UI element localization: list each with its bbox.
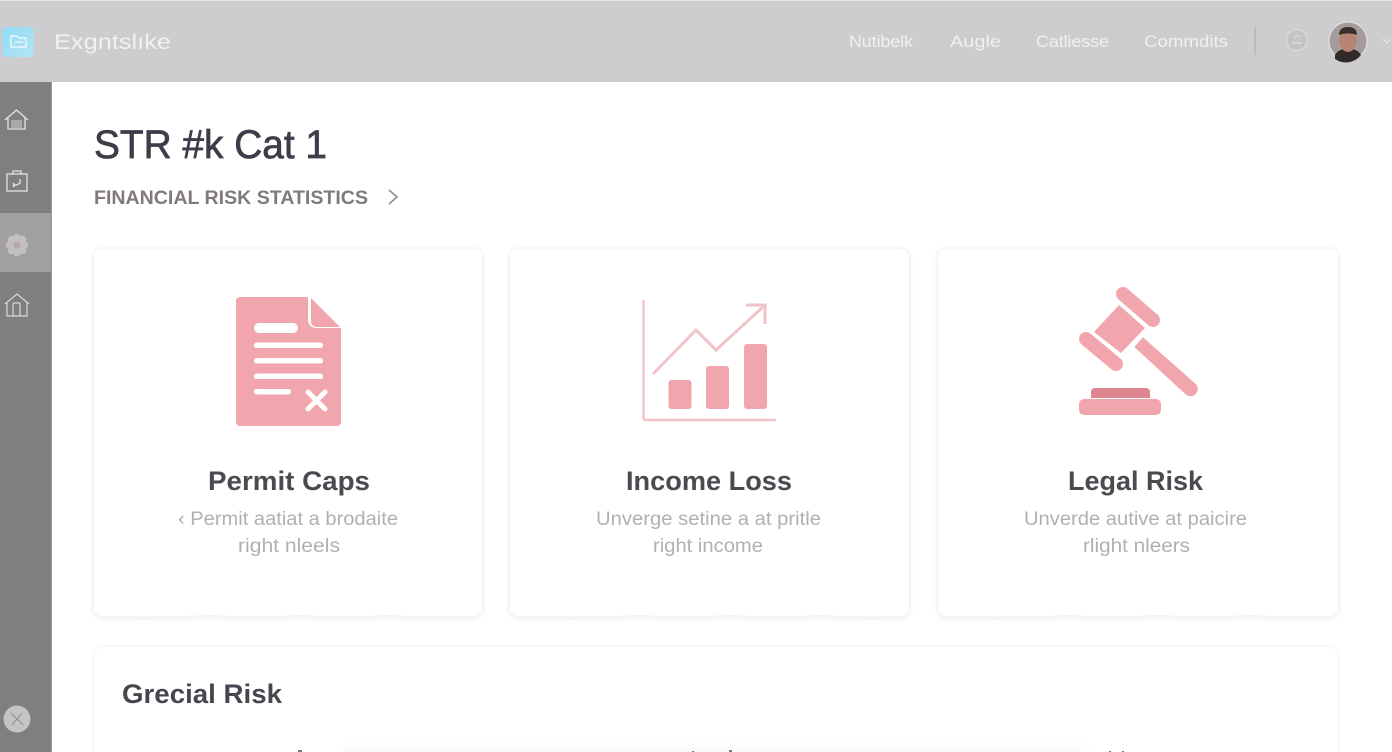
- brand name: Exgntslıke: [54, 31, 171, 54]
- panel: permit caps: [93, 248, 483, 617]
- icon: calendar: [7, 171, 27, 191]
- chart tick marks: [298, 750, 1124, 752]
- card description: Unverge setine a at pritle: [596, 509, 821, 530]
- panel: income loss: [509, 248, 910, 617]
- card heading: Legal Risk: [1068, 466, 1204, 496]
- nav links: Nutibelk: [849, 32, 914, 51]
- nav links: [849, 32, 1228, 51]
- card heading: Income Loss: [626, 466, 792, 496]
- nav links: Catliesse: [1036, 32, 1109, 51]
- card description: right income: [653, 536, 763, 557]
- panel heading: Grecial Risk: [122, 679, 283, 709]
- icon: close button: [4, 706, 30, 732]
- faded chart area: [345, 750, 1085, 752]
- icon: settings flower: [6, 234, 28, 256]
- icon: gavel: [1079, 294, 1197, 415]
- card description: [596, 509, 821, 557]
- icon: dropdown chevron: [1383, 39, 1391, 43]
- header bar: [0, 0, 1392, 82]
- card description: ‹ Permit aatiat a brodaite: [178, 509, 398, 530]
- icon: document with cross: [236, 297, 341, 426]
- icon: home: [5, 110, 28, 129]
- card description: rlight nleers: [1083, 536, 1190, 557]
- card heading: Permit Caps: [208, 466, 370, 496]
- nav links: Augle: [950, 32, 1001, 51]
- page title: STR #k Cat 1: [94, 123, 327, 167]
- panel: legal risk: [937, 248, 1339, 617]
- sidebar: [0, 82, 52, 752]
- card description: right nleels: [238, 536, 340, 557]
- icon: app logo: [2, 27, 34, 57]
- card description: [178, 509, 398, 557]
- icon: chevron: [389, 190, 397, 204]
- section subtitle: FINANCIAL RISK STATISTICS: [94, 188, 368, 209]
- icon: notification: [1286, 30, 1308, 50]
- panel: grecial risk: [94, 646, 1338, 752]
- card description: Unverde autive at paicire: [1024, 509, 1247, 530]
- icon: growth chart: [644, 301, 775, 420]
- card description: [1024, 509, 1247, 557]
- user avatar: [1329, 22, 1367, 62]
- nav links: Commdits: [1144, 32, 1228, 51]
- active sidebar item: [0, 213, 51, 272]
- icon: building: [5, 294, 29, 316]
